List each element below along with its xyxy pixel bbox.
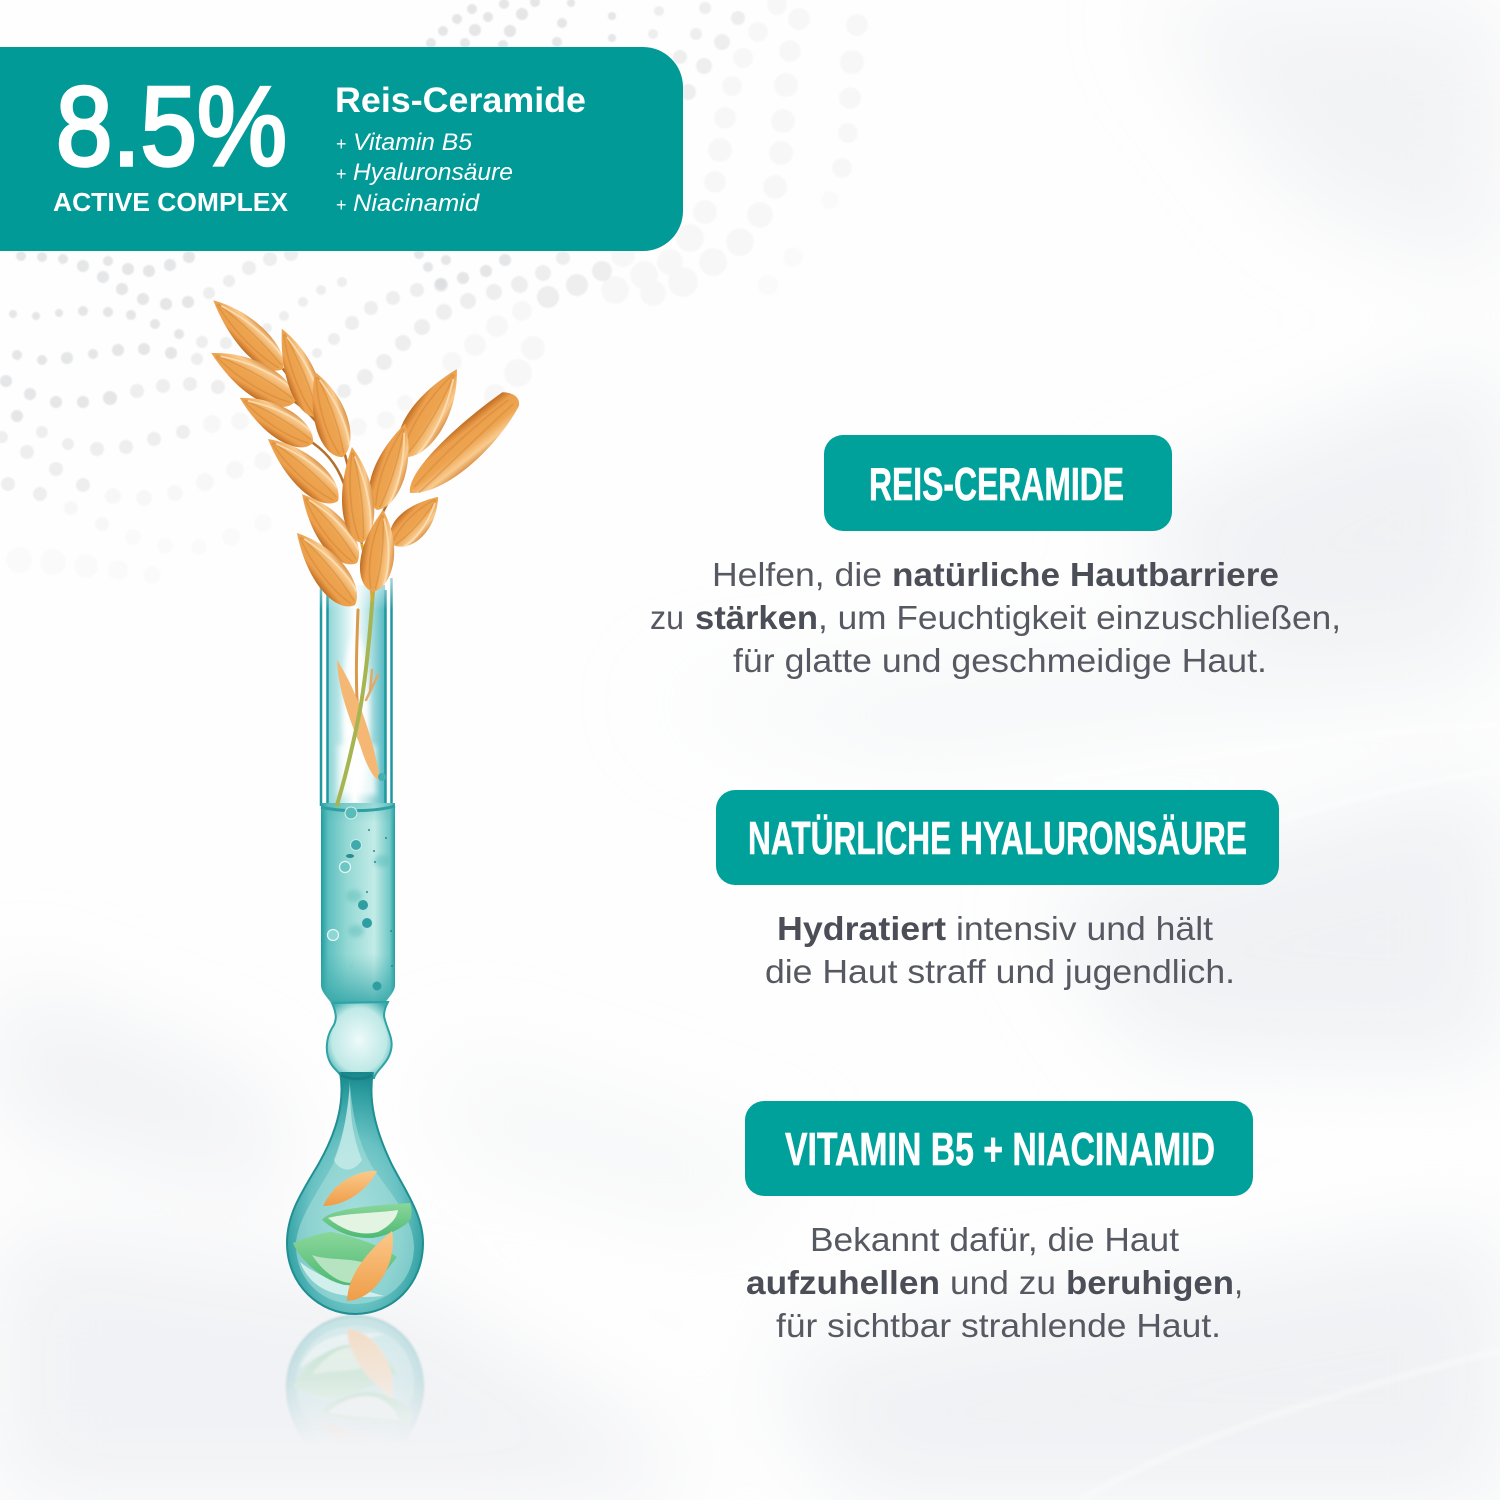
text: Reis-Ceramide description: , um Feuchtigkeit einzuschließen, [818, 599, 1341, 636]
ingredient list: + [336, 164, 347, 184]
water drop with aloe and rice [287, 1072, 423, 1314]
text: Hyaluronsäure description: die Haut straff und jugendlich. [765, 953, 1235, 990]
panel: active complex [0, 47, 683, 251]
rice stalks [283, 369, 403, 600]
badge: Vitamin B5 + Niacinamid: VITAMIN B5 + NIACINAMID [785, 1123, 1215, 1175]
neck bulb [327, 1002, 392, 1078]
illustration: dropper tube with rice and drop [211, 300, 520, 1430]
badge: Reis-Ceramide [824, 435, 1172, 531]
text: Reis-Ceramide description: natürliche Hautbarriere [892, 556, 1279, 593]
liquid [321, 803, 395, 1004]
active complex label: ACTIVE COMPLEX [53, 187, 289, 217]
ingredient list: + [336, 195, 347, 215]
ingredient list: Vitamin B5 [353, 129, 473, 156]
ingredient list [336, 129, 513, 217]
text: Hyaluronsäure description: Hydratiert [777, 910, 946, 947]
ingredient list: Hyaluronsäure [353, 159, 513, 186]
badge: Reis-Ceramide: REIS-CERAMIDE [869, 458, 1124, 510]
badge: Natürliche Hyaluronsäure: NATÜRLICHE HYALURONSÄURE [748, 812, 1247, 864]
section: Reis-Ceramide [650, 435, 1341, 679]
halftone dots [0, 0, 868, 584]
text: Hyaluronsäure description: intensiv und hält [956, 910, 1213, 947]
section: Vitamin B5 und Niacinamid [745, 1101, 1253, 1344]
text: Vitamin B5 description: beruhigen [1066, 1264, 1234, 1301]
text: Reis-Ceramide description [650, 556, 1341, 679]
glass tube [318, 570, 394, 807]
ingredient heading: Reis-Ceramide [335, 81, 586, 120]
text: Vitamin B5 description: , [1234, 1264, 1243, 1301]
stem in tube [337, 590, 386, 805]
bubbles [328, 807, 393, 990]
text: Reis-Ceramide description: zu [650, 599, 684, 636]
text: Reis-Ceramide description: für glatte und geschmeidige Haut. [733, 642, 1267, 679]
text: Vitamin B5 description: und zu [950, 1264, 1056, 1301]
section: Hyaluronsäure [716, 790, 1279, 990]
drop reflection [285, 1314, 425, 1430]
ingredient list: Niacinamid [353, 190, 480, 217]
ingredient list: + [336, 134, 347, 154]
badge: Vitamin B5 + Niacinamid [745, 1101, 1253, 1196]
text: Vitamin B5 description: aufzuhellen [746, 1264, 940, 1301]
big percentage: 8.5% [56, 64, 287, 189]
text: Vitamin B5 description: für sichtbar strahlende Haut. [776, 1307, 1221, 1344]
text: Vitamin B5 description [746, 1221, 1243, 1344]
rice grains [203, 289, 532, 615]
badge: Natürliche Hyaluronsäure [716, 790, 1279, 885]
text: Reis-Ceramide description: stärken [695, 599, 818, 636]
text: Vitamin B5 description: Bekannt dafür, die Haut [810, 1221, 1179, 1258]
text: Reis-Ceramide description: Helfen, die [712, 556, 882, 593]
text: Hyaluronsäure description [765, 910, 1235, 990]
